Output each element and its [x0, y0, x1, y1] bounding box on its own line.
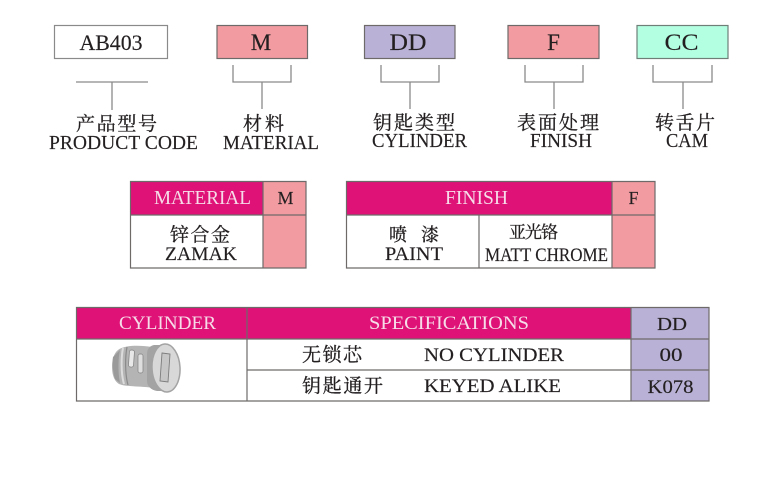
specifications header label: SPECIFICATIONS: [369, 313, 529, 334]
finish option: paint: [385, 221, 443, 265]
spec row: keyed alike: KEYED ALIKE: [424, 377, 561, 397]
table: finish: [346, 181, 655, 268]
code segment: product code: 产品型号: [76, 109, 157, 136]
cylinder table borders: [76, 308, 709, 401]
icon: lock cylinder: [112, 343, 181, 393]
code segment: finish: [508, 26, 599, 152]
code segment: material: M: [251, 30, 271, 55]
code segment: cylinder: CYLINDER: [372, 130, 468, 152]
material code column: [263, 181, 306, 268]
dd code column: [631, 307, 709, 401]
finish option: matt chrome: [485, 218, 608, 266]
code segment: product code: AB403: [80, 30, 142, 55]
code segment: cylinder: 钥匙类型: [373, 108, 455, 135]
material option: zamak: ZAMAK: [165, 244, 237, 265]
specifications header: [247, 307, 631, 339]
material table borders: [130, 182, 306, 268]
code segment: material: [217, 26, 319, 154]
finish option: paint: PAINT: [385, 244, 443, 265]
cylinder header: [76, 307, 247, 339]
material option: zamak: 锌合金: [170, 220, 230, 247]
table: cylinder specifications: [76, 307, 709, 401]
finish header label: FINISH: [445, 187, 508, 209]
table: material: [130, 181, 306, 268]
code segment: cam: CAM: [666, 130, 708, 152]
spec row: keyed alike: 钥匙通开: [302, 371, 383, 398]
code segment: product code: [49, 26, 198, 154]
finish table borders: [346, 182, 655, 268]
finish option: paint: 喷 漆: [389, 221, 439, 247]
code segment: cam: [637, 26, 728, 152]
finish option: matt chrome: MATT CHROME: [485, 245, 608, 266]
code segment: finish: FINISH: [530, 130, 592, 152]
code segment: finish: F: [547, 30, 560, 55]
code segment: cam: 转舌片: [655, 108, 715, 135]
code segment: cylinder: [364, 26, 468, 152]
material code letter: M: [277, 188, 294, 208]
code segment: material: 材料: [243, 109, 284, 136]
code segment: product code: PRODUCT CODE: [49, 132, 198, 154]
spec row: no cylinder: 00: [660, 345, 682, 366]
material header label: MATERIAL: [154, 187, 251, 209]
cylinder header label: CYLINDER: [119, 313, 216, 334]
dd code label: DD: [657, 314, 687, 334]
finish option: matt chrome: 亚光铬: [509, 218, 558, 243]
code segment: finish: 表面处理: [517, 108, 599, 135]
material option: zamak: [165, 220, 237, 265]
code segment: cam: CC: [664, 30, 698, 55]
code segment: material: MATERIAL: [223, 132, 319, 154]
spec row: keyed alike: [302, 371, 694, 398]
finish code letter: F: [628, 188, 639, 208]
spec row: no cylinder: NO CYLINDER: [424, 346, 565, 366]
material header: [130, 181, 263, 215]
finish code column: [612, 181, 655, 268]
finish header: [346, 181, 612, 215]
spec row: no cylinder: 无锁芯: [302, 340, 363, 367]
code segment: cylinder: DD: [390, 30, 426, 55]
spec row: keyed alike: K078: [648, 377, 694, 398]
spec row: no cylinder: [302, 340, 682, 367]
